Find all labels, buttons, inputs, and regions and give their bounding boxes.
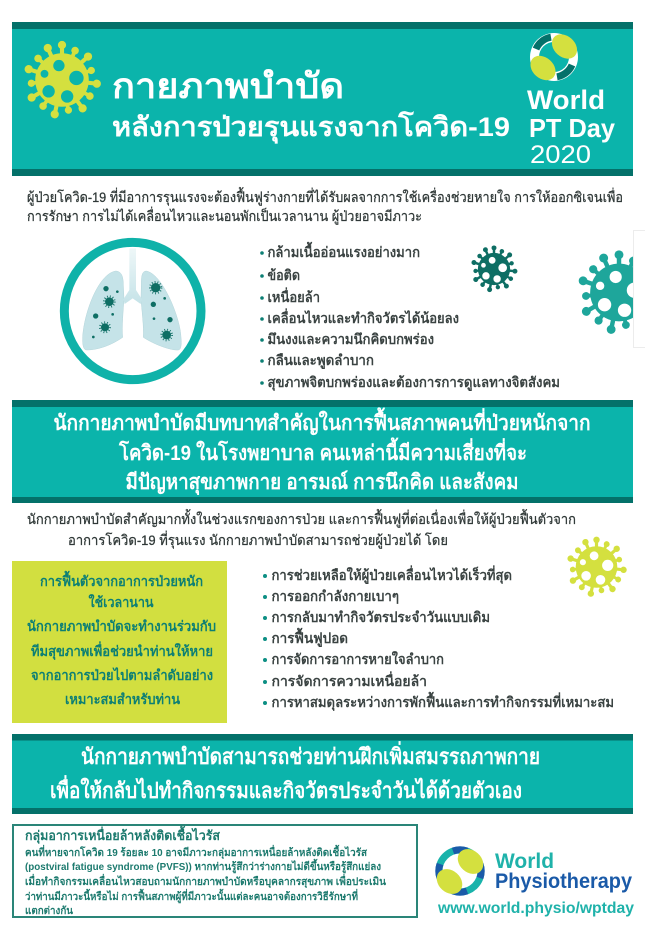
logo: World PT Day 2020: PT Day [529, 113, 616, 143]
icon: World PT Day emblem [526, 29, 582, 85]
list: how physiotherapists help: การหาสมดุลระหว่างการพักฟื้นและการทำกิจกรรมที่เหมาะสม [272, 691, 614, 711]
banner: role of physiotherapists: มีปัญหาสุขภาพกาย อารมณ์ การนึกคิด และสังคม [126, 470, 518, 496]
logo: World PT Day 2020: World [527, 85, 605, 115]
panel: recovery takes time: ใช้เวลานาน [88, 593, 154, 610]
symptom list: กลืนและพูดลำบาก [268, 352, 374, 369]
symptom list: สุขภาพจิตบกพร่องและต้องการการดูแลทางจิตสังคม [268, 374, 560, 391]
icon: clipped teal virus [578, 250, 633, 334]
intro text: การรักษา การไม่ได้เคลื่อนไหวและนอนพักเป็นเวลานาน ผู้ป่วยอาจมีภาวะ [27, 207, 422, 225]
panel: post-viral fatigue note [13, 825, 417, 917]
faint frame at right edge [634, 230, 645, 348]
panel: post-viral fatigue note: แตกต่างกัน [25, 905, 74, 917]
title [112, 67, 510, 144]
header banner [12, 22, 633, 176]
banner: build physical capacity: นักกายภาพบำบัดสามารถช่วยท่านฝึกเพิ่มสมรรถภาพกาย [81, 740, 540, 769]
panel: post-viral fatigue note: ว่าท่านมีภาวะนี้หรือไม่ การฟื้นสภาพผู้ที่มีภาวะนั้นแต่ละคนอาจต้องการวิธีรักษาที่ [25, 888, 358, 904]
panel: recovery takes time: เหมาะสมสำหรับท่าน [65, 691, 180, 707]
intro text [27, 187, 623, 225]
panel: recovery takes time [12, 561, 227, 723]
list: how physiotherapists help: การจัดการความเหนื่อยล้า [272, 671, 427, 689]
list: how physiotherapists help [263, 565, 614, 711]
panel: post-viral fatigue note: กลุ่มอาการเหนื่อยล้าหลังติดเชื้อไวรัส [25, 825, 220, 844]
list: how physiotherapists help: การฟื้นฟูปอด [272, 627, 348, 647]
banner: build physical capacity [12, 734, 633, 814]
panel: recovery takes time: จากอาการป่วยไปตามลำดับอย่าง [31, 666, 213, 683]
panel: post-viral fatigue note: คนที่หายจากโควิด 19 ร้อยละ 10 อาจมีภาวะกลุ่มอาการเหนื่อยล้าหลังติดเชื้อไวรัส [25, 844, 368, 860]
paragraph: importance of physiotherapy: อาการโควิด-19 ที่รุนแรง นักกายภาพบำบัดสามารถช่วยผู้ป่วยได้ โดย [68, 531, 448, 549]
title: หลังการป่วยรุนแรงจากโควิด-19 [112, 110, 510, 144]
logo: World Physiotherapy: World [495, 850, 554, 873]
logo: World PT Day 2020: 2020 [530, 141, 591, 169]
panel: post-viral fatigue note: (postviral fatigue syndrome (PVFS)) หากท่านรู้สึกว่าร่างกายไม่ดีขึ้นหรือรู้สึกแย่ลง [25, 858, 381, 874]
panel: recovery takes time: การฟื้นตัวจากอาการป่วยหนัก [40, 570, 203, 589]
icon: lungs with virus in ring [64, 242, 201, 380]
list: how physiotherapists help: การจัดการอาการหายใจลำบาก [272, 650, 444, 667]
symptom list: กล้ามเนื้ออ่อนแรงอย่างมาก [268, 241, 420, 260]
panel: post-viral fatigue note: เมื่อทำกิจกรรมเคลื่อนไหวสอบถามนักกายภาพบำบัดหรือบุคลากรสุขภาพ เพื่อประเมิน [25, 873, 387, 889]
symptom list: เหนื่อยล้า [268, 287, 320, 305]
banner: role of physiotherapists: นักกายภาพบำบัดมีบทบาทสำคัญในการฟื้นสภาพคนที่ป่วยหนักจาก [54, 407, 590, 436]
logo: World Physiotherapy: www.world.physio/wptday [437, 900, 634, 917]
symptom list [260, 241, 560, 391]
list: how physiotherapists help: การช่วยเหลือให้ผู้ป่วยเคลื่อนไหวได้เร็วที่สุด [272, 565, 512, 584]
panel: recovery takes time: นักกายภาพบำบัดจะทำงานร่วมกับ [27, 618, 216, 634]
banner: role of physiotherapists: โควิด-19 ในโรงพยาบาล คนเหล่านี้มีความเสี่ยงที่จะ [118, 437, 527, 465]
panel: recovery takes time: ทีมสุขภาพเพื่อช่วยนำท่านให้หาย [31, 641, 213, 660]
icon: yellow-green coronavirus [24, 41, 101, 119]
logo: World Physiotherapy: Physiotherapy [495, 870, 632, 893]
banner: build physical capacity: เพื่อให้กลับไปทำกิจกรรมและกิจวัตรประจำวันได้ด้วยตัวเอง [50, 774, 522, 803]
list: how physiotherapists help: การกลับมาทำกิจวัตรประจำวันแบบเดิม [272, 609, 490, 625]
symptom list: มึนงงและความนึกคิดบกพร่อง [268, 331, 434, 347]
list: how physiotherapists help: การออกกำลังกายเบาๆ [272, 588, 399, 604]
icon: World Physiotherapy emblem [432, 844, 488, 899]
logo: World PT Day 2020 [526, 29, 616, 169]
logo: World Physiotherapy [432, 844, 634, 917]
icon: dark teal virus [471, 245, 518, 293]
icon: yellow-green virus [567, 537, 627, 597]
symptom list: เคลื่อนไหวและทำกิจวัตรได้น้อยลง [268, 308, 459, 326]
title: กายภาพบำบัด [112, 67, 344, 106]
paragraph: importance of physiotherapy [27, 509, 576, 549]
symptom list: ข้อติด [268, 267, 300, 283]
paragraph: importance of physiotherapy: นักกายภาพบำบัดสำคัญมากทั้งในช่วงแรกของการป่วย และการฟื้นฟูที่ต่อเนื่องเพื่อให้ผู้ป่วยฟื้นตัวจาก [27, 509, 576, 528]
banner: role of physiotherapists [12, 400, 633, 503]
